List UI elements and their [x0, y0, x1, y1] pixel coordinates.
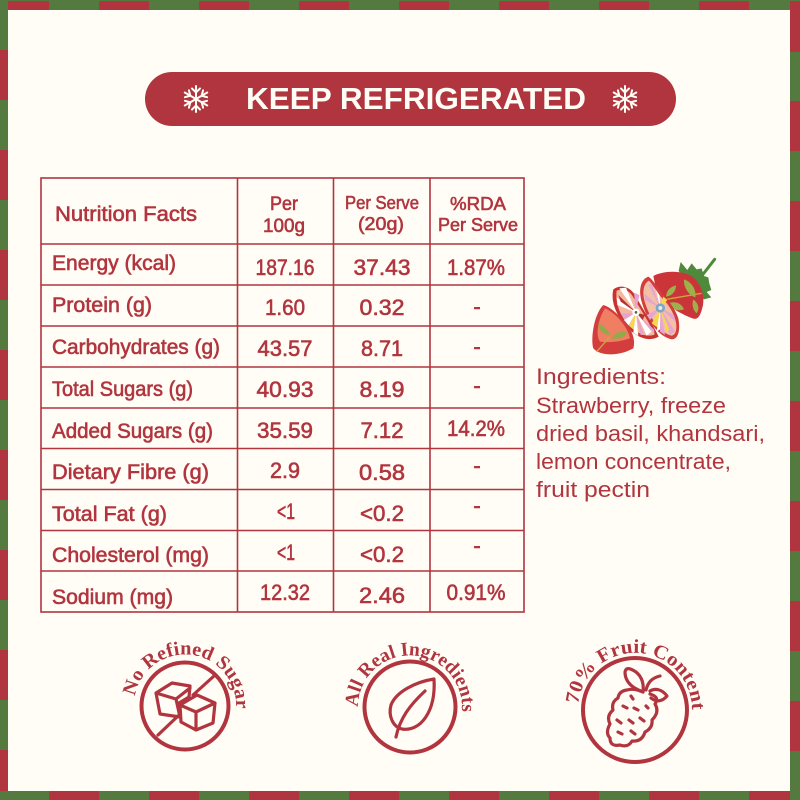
table row labels: Total Sugars (g): [52, 378, 193, 401]
table header row: [55, 192, 518, 237]
table header row: 100g: [263, 216, 305, 237]
table header row: Per Serve: [438, 214, 518, 235]
percent RDA values: 1.87%: [447, 255, 505, 280]
badge: all real ingredients: [346, 642, 473, 754]
banner heading: KEEP REFRIGERATED: [246, 81, 586, 116]
icon: leaf: [390, 679, 434, 737]
table row labels: [52, 252, 220, 609]
curved label: 70% fruit content: 70% Fruit Content: [566, 639, 703, 710]
per serve values: 0.32: [360, 295, 404, 320]
per serve values: 0.58: [359, 460, 405, 485]
illustration: sliced strawberry: [592, 259, 715, 354]
ingredients text: [536, 364, 765, 502]
banner: keep refrigerated: [145, 72, 676, 126]
percent RDA values: -: [473, 453, 481, 478]
icon: crossed-out sugar cubes: [156, 676, 215, 735]
table header row: Per: [270, 194, 299, 215]
table header row: (20g): [358, 213, 404, 234]
percent RDA values: -: [473, 373, 481, 398]
icon: berry: [608, 669, 667, 746]
per 100g values: [256, 255, 314, 605]
per serve values: 2.46: [359, 583, 405, 608]
percent RDA values: -: [473, 334, 481, 359]
ingredients text: dried basil, khandsari,: [536, 421, 765, 446]
per 100g values: <1: [277, 499, 295, 524]
table row labels: Carbohydrates (g): [52, 336, 220, 359]
per serve values: [354, 255, 410, 608]
per serve values: <0.2: [360, 501, 404, 526]
table row labels: Added Sugars (g): [52, 420, 213, 443]
table header row: Per Serve: [345, 192, 419, 213]
table row labels: Energy (kcal): [52, 252, 176, 275]
percent RDA values: 0.91%: [446, 580, 506, 605]
icon: right snowflake: [612, 86, 638, 112]
ingredients text: lemon concentrate,: [536, 449, 731, 474]
table row labels: Protein (g): [52, 294, 152, 317]
table row labels: Total Fat (g): [52, 503, 167, 526]
curved label: no refined sugar: No Refined Sugar: [122, 642, 246, 708]
per 100g values: <1: [277, 540, 295, 565]
table row labels: Dietary Fibre (g): [52, 461, 209, 484]
ingredients text: Strawberry, freeze: [536, 393, 726, 418]
per 100g values: 35.59: [257, 418, 313, 443]
percent RDA values: -: [473, 294, 481, 319]
ingredients text: Ingredients:: [536, 364, 666, 389]
table header row: Nutrition Facts: [55, 203, 197, 226]
percent RDA values: -: [473, 493, 481, 518]
percent RDA values: -: [473, 533, 481, 558]
table header row: %RDA: [450, 193, 507, 214]
per 100g values: 12.32: [260, 580, 310, 605]
percent RDA values: [446, 255, 506, 605]
curved label: all real ingredients: All Real Ingredients: [346, 642, 473, 712]
per serve values: 7.12: [360, 418, 404, 443]
nutrition facts table: [41, 178, 524, 612]
icon: left snowflake: [183, 86, 209, 112]
per serve values: 37.43: [354, 255, 410, 280]
per 100g values: 40.93: [256, 377, 314, 402]
per 100g values: 187.16: [256, 255, 314, 280]
per 100g values: 1.60: [265, 295, 305, 320]
per 100g values: 2.9: [270, 458, 300, 483]
badge: 70% fruit content: [566, 639, 703, 764]
per serve values: <0.2: [360, 542, 404, 567]
table row labels: Sodium (mg): [52, 586, 173, 609]
table row labels: Cholesterol (mg): [52, 544, 209, 567]
per 100g values: 43.57: [258, 336, 312, 361]
per serve values: 8.19: [360, 377, 404, 402]
per serve values: 8.71: [361, 336, 403, 361]
percent RDA values: 14.2%: [447, 416, 505, 441]
badge: no refined sugar: [122, 642, 246, 752]
ingredients text: fruit pectin: [536, 477, 650, 502]
